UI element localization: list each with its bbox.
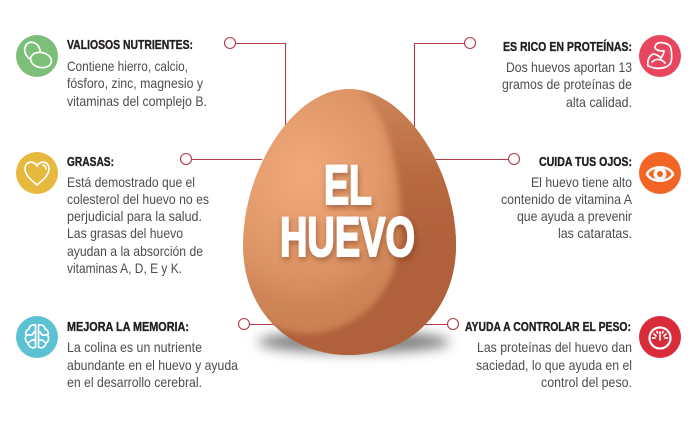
egg illustration: [243, 89, 456, 355]
connector: es rico en proteinas: [414, 38, 476, 130]
panel: mejora la memoria: [16, 316, 238, 390]
connector: ayuda a controlar el peso: [415, 318, 458, 330]
panel: valiosos nutrientes: [16, 35, 207, 109]
body text: saciedad, lo que ayuda en el: [476, 357, 632, 373]
panel: cuida tus ojos: [501, 152, 681, 241]
heading: AYUDA A CONTROLAR EL PESO:: [465, 319, 631, 334]
icon: two eggs: [16, 35, 58, 77]
body text: vitaminas A, D, E y K.: [67, 260, 182, 276]
body text: Contiene hierro, calcio,: [67, 58, 188, 74]
panel: grasas: [16, 152, 209, 276]
body text: [67, 174, 209, 276]
body text: vitaminas del complejo B.: [67, 93, 207, 109]
title: el huevo: HUEVO: [280, 205, 415, 268]
heading: GRASAS:: [67, 154, 114, 169]
connector: cuida tus ojos: [435, 154, 520, 164]
body text: Las grasas del huevo: [67, 225, 183, 241]
body text: gramos de proteínas de: [502, 76, 632, 92]
egg shadow: [258, 331, 450, 353]
connector: valiosos nutrientes: [224, 38, 286, 125]
body text: El huevo tiene alto: [531, 174, 632, 190]
body text: que ayuda a prevenir: [517, 208, 632, 224]
connector: grasas: [180, 154, 262, 164]
body text: [502, 59, 632, 110]
body text: contenido de vitamina A: [501, 191, 633, 207]
icon: flexed arm: [639, 35, 681, 77]
body text: La colina es un nutriente: [67, 339, 202, 355]
body text: las cataratas.: [558, 225, 632, 241]
heading: MEJORA LA MEMORIA:: [67, 319, 189, 334]
title: el huevo: EL: [324, 153, 372, 216]
heading: VALIOSOS NUTRIENTES:: [67, 37, 193, 52]
panel: ayuda a controlar el peso: [465, 316, 681, 390]
body text: Dos huevos aportan 13: [506, 59, 632, 75]
body text: [67, 339, 238, 390]
panel: es rico en proteinas: [502, 35, 681, 110]
body text: alta calidad.: [566, 94, 632, 110]
icon: brain: [16, 316, 58, 358]
connector: mejora la memoria: [238, 318, 285, 330]
body text: Está demostrado que el: [67, 174, 195, 190]
icon: heart: [16, 152, 58, 194]
body text: perjudicial para la salud.: [67, 208, 202, 224]
icon: weighing scale: [639, 316, 681, 358]
body text: ayudan a la absorción de: [67, 243, 203, 259]
body text: fósforo, zinc, magnesio y: [67, 75, 203, 91]
body text: control del peso.: [541, 374, 632, 390]
body text: colesterol del huevo no es: [67, 191, 209, 207]
body text: abundante en el huevo y ayuda: [67, 357, 238, 373]
body text: Las proteínas del huevo dan: [477, 339, 632, 355]
title: el huevo: [280, 153, 415, 268]
icon: eye: [639, 152, 681, 194]
body text: [501, 174, 633, 241]
body text: en el desarrollo cerebral.: [67, 374, 202, 390]
body text: [476, 339, 632, 390]
heading: CUIDA TUS OJOS:: [539, 154, 632, 169]
heading: ES RICO EN PROTEÍNAS:: [503, 39, 632, 54]
body text: [67, 58, 207, 109]
